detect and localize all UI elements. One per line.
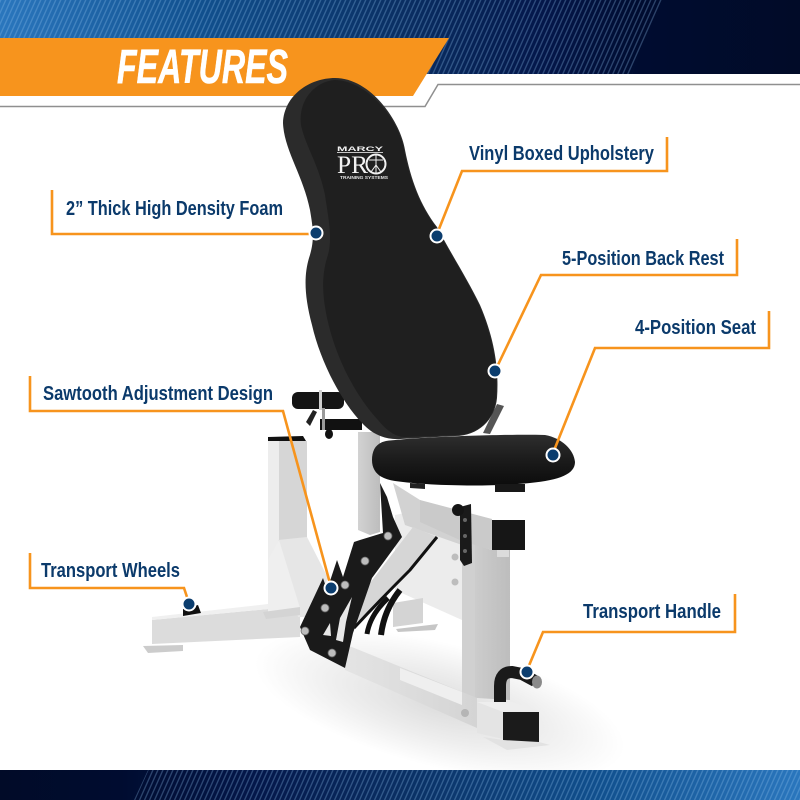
floor shadow: [241, 599, 639, 800]
callout: transport wheels: Transport Wheels: [41, 560, 180, 582]
diagonal white brace: [353, 527, 437, 627]
transport handle: [500, 672, 542, 704]
callout: high density foam: [52, 190, 322, 240]
callout: vinyl boxed upholstery: Vinyl Boxed Upholstery: [469, 143, 655, 165]
callout: back rest: [488, 239, 737, 378]
sawtooth plate: [300, 483, 402, 668]
header rule line: [0, 84, 800, 106]
callout: sawtooth: Sawtooth Adjustment Design: [43, 383, 273, 405]
seat arm and black end cap: [420, 500, 525, 557]
curved black straps: [354, 537, 437, 635]
back rest vinyl face: [301, 80, 496, 437]
brand logo: MARCY: [337, 147, 383, 153]
brand logo: TRAINING SYSTEMS: [340, 175, 388, 180]
front base rail: [345, 645, 477, 728]
center post: [358, 432, 380, 535]
heading: FEATURES: [117, 41, 288, 94]
weight bench: [143, 78, 575, 750]
callout: sawtooth: [30, 376, 338, 594]
back rest: [283, 78, 497, 439]
front foot: [461, 702, 550, 750]
callout: transport handle: Transport Handle: [583, 601, 721, 623]
adjustment bracket with knob: [452, 504, 472, 566]
features ribbon: [0, 38, 449, 96]
callout: transport wheels: [30, 553, 196, 610]
front column: [462, 540, 510, 700]
callout: seat: [546, 311, 769, 462]
footer band: [0, 770, 800, 800]
front brace background: [393, 483, 462, 632]
seat: [372, 435, 575, 492]
brand logo: [337, 147, 388, 180]
rear base rail: [143, 604, 300, 653]
callout: transport handle: [520, 594, 735, 678]
callout: vinyl boxed upholstery: [430, 137, 667, 242]
callout: high density foam: 2” Thick High Density Foam: [66, 198, 283, 220]
back rest bracket: [483, 404, 504, 434]
callout: back rest: 5-Position Back Rest: [562, 248, 724, 270]
callout: seat: 4-Position Seat: [635, 317, 756, 339]
back rest edge: [283, 78, 497, 439]
header band: [0, 0, 800, 74]
pivot bar and pin: [292, 390, 362, 439]
brand logo: PR: [337, 152, 368, 179]
transport wheel: [183, 605, 201, 616]
rear column: [263, 436, 328, 619]
